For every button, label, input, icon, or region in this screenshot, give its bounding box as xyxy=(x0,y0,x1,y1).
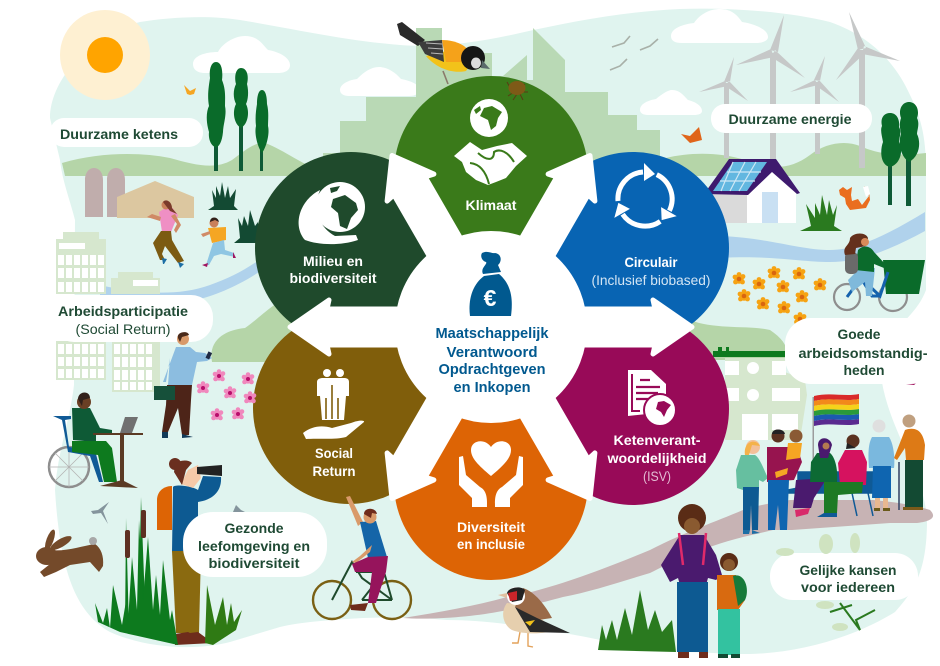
label: Ketenverantwoordelijkheid xyxy=(606,433,706,484)
grass tufts dark xyxy=(208,182,258,243)
label: Diversiteit: Diversiteit xyxy=(457,520,526,535)
runner girl xyxy=(201,218,236,267)
runner woman xyxy=(147,200,184,268)
goldfinch xyxy=(498,587,570,647)
label: Circulair xyxy=(592,255,710,288)
label: Diversiteit xyxy=(457,520,526,552)
clouds xyxy=(193,9,768,115)
heading: Gelijke kansen: voor iedereen xyxy=(801,579,895,595)
windmill 1 xyxy=(699,57,748,158)
group of people on bench xyxy=(736,414,925,534)
label pill: Gezonde on top of birdwatcher xyxy=(183,512,327,577)
wheel segments xyxy=(253,76,729,580)
label: Klimaat: Klimaat xyxy=(466,198,517,213)
label: Circulair: Circulair xyxy=(624,255,678,270)
pale buildings behind wheel xyxy=(323,28,660,176)
bench xyxy=(788,472,873,516)
central title: Opdrachtgeven xyxy=(438,361,546,378)
heading: Duurzame energie: Duurzame energie xyxy=(728,111,852,127)
rabbit xyxy=(36,528,103,577)
butterflies xyxy=(184,85,926,385)
central title: Verantwoord xyxy=(446,344,538,361)
hills xyxy=(62,143,926,362)
recycle arrow 2 xyxy=(638,175,690,226)
heading: Arbeidsparticipatie xyxy=(58,303,188,337)
segment: diversiteit xyxy=(394,386,588,580)
label: Circulair: (Inclusief biobased) xyxy=(592,273,710,288)
label: Social Return: Return xyxy=(312,464,356,479)
building right xyxy=(713,347,807,440)
icon: people on hand xyxy=(303,369,364,439)
heading: Gezonde leefomgeving: Gezonde xyxy=(224,520,284,536)
girl in teal sweater xyxy=(736,440,768,534)
recycle arrow 3 xyxy=(609,189,660,240)
flowers orange xyxy=(733,266,826,324)
icon: globe and leaf xyxy=(299,182,365,244)
dragonfly xyxy=(91,502,109,524)
segment: social return xyxy=(253,312,445,504)
heading: Gezonde leefomgeving: leefomgeving en xyxy=(198,538,310,554)
heading: Goede arbeidsomstandigheden xyxy=(798,326,928,378)
bottom grass xyxy=(598,590,676,652)
buildings left xyxy=(56,232,160,392)
heading: Goede arbeidsomstandigheden: heden xyxy=(844,362,884,378)
icon: recycle arrows xyxy=(609,163,690,240)
white hub and arrows xyxy=(290,142,692,512)
grass tuft right xyxy=(800,195,842,231)
man in red sweater xyxy=(817,434,867,517)
central title: Maatschappelijk xyxy=(436,325,549,342)
heading: Gezonde leefomgeving xyxy=(198,520,310,571)
pink flowers xyxy=(197,369,256,420)
plants bottom right xyxy=(776,533,875,631)
mother with child xyxy=(661,504,747,658)
windmill 2 xyxy=(736,15,805,160)
heading: Arbeidsparticipatie: (Social Return) xyxy=(76,321,170,337)
heading: Gezonde leefomgeving: biodiversiteit xyxy=(208,555,300,571)
central title: en Inkopen xyxy=(454,379,530,396)
recycle arrow 1 xyxy=(618,163,655,201)
cargo cyclist xyxy=(834,234,925,311)
fox xyxy=(839,186,870,210)
heading: Gelijke kansen: Gelijke kansen xyxy=(800,562,896,578)
label: Ketenverantwoordelijkheid: Ketenverant- xyxy=(614,433,700,448)
segment: klimaat xyxy=(394,76,588,270)
label pills xyxy=(50,104,937,600)
trees right xyxy=(881,102,919,206)
beetle xyxy=(507,81,528,100)
path xyxy=(403,500,933,619)
windmill 3 xyxy=(790,56,839,154)
silos and barn xyxy=(85,168,194,218)
bird: great tit xyxy=(397,22,490,84)
icon: heart in hands xyxy=(459,441,523,507)
label: Diversiteit: en inclusie xyxy=(457,537,525,552)
central title xyxy=(436,325,549,396)
icon: globe and handshake xyxy=(454,99,527,185)
icon: document and globe xyxy=(628,370,676,426)
label: Milieu en biodiversiteit: Milieu en xyxy=(303,254,363,269)
sun xyxy=(60,10,150,100)
heading: Arbeidsparticipatie: Arbeidsparticipatie xyxy=(58,303,188,319)
heading: Goede arbeidsomstandigheden: Goede xyxy=(838,326,881,342)
segment: milieu xyxy=(255,152,447,344)
segment: ketenverantwoordelijkheid xyxy=(537,313,729,505)
small bird xyxy=(232,505,245,513)
house with solar panels xyxy=(704,159,800,223)
label: Milieu en biodiversiteit xyxy=(290,254,377,286)
heading: Gelijke kansen xyxy=(800,562,896,595)
segment: circulair xyxy=(537,152,729,344)
flying birds xyxy=(610,36,658,70)
reeds and grass xyxy=(95,497,242,645)
heading: Duurzame ketens: Duurzame ketens xyxy=(60,126,178,142)
poplar trees left xyxy=(207,62,269,171)
label: Social Return: Social xyxy=(315,446,353,461)
label: Ketenverantwoordelijkheid: (ISV) xyxy=(643,469,671,484)
man with toddler xyxy=(767,430,802,530)
label: Social Return xyxy=(312,446,356,479)
cyclist waving xyxy=(313,496,411,619)
river right xyxy=(720,212,925,262)
man with phone and briefcase xyxy=(154,332,212,438)
woman in hijab xyxy=(793,438,837,517)
older woman xyxy=(868,420,894,511)
rainbow flag xyxy=(812,394,859,463)
windmills xyxy=(699,12,900,168)
person in wheelchair at table xyxy=(49,392,143,488)
euro sign: € xyxy=(484,285,497,311)
label: Milieu en biodiversiteit: biodiversiteit xyxy=(290,271,377,286)
older man with cane xyxy=(894,414,925,510)
icon: money bag xyxy=(470,252,512,316)
label: Ketenverantwoordelijkheid: woordelijkheid xyxy=(606,451,706,466)
birdwatcher xyxy=(157,458,222,645)
river left xyxy=(100,258,262,302)
windmill 4 xyxy=(836,12,900,168)
heading: Goede arbeidsomstandigheden: arbeidsomstandig- xyxy=(798,345,928,361)
